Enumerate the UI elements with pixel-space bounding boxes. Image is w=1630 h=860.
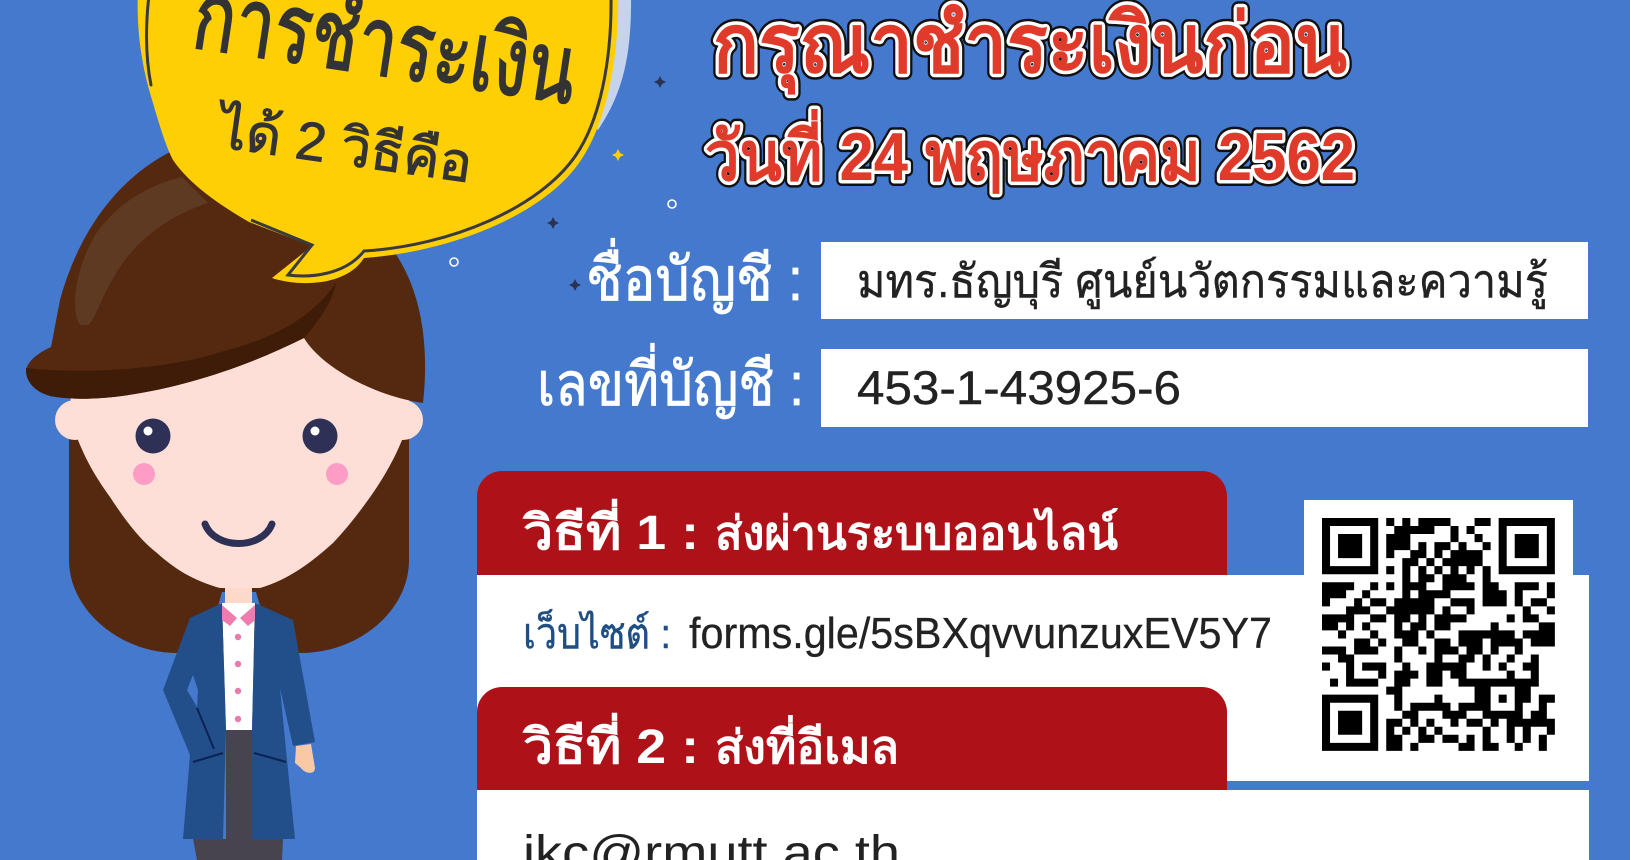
sparkles [450,76,676,291]
red tab [477,471,1227,575]
character: woman in blue jacket [26,135,425,860]
face [68,330,412,588]
value box [821,242,1588,319]
tab heading number: วิธีที่ 1 : [522,498,699,560]
bubble text line 2: ได้ 2 วิธีคือ [211,98,476,194]
left eye [136,418,170,454]
bubble shadow [560,0,631,130]
collar [222,605,255,626]
account number row [537,343,1588,427]
title: payment deadline [705,0,1355,195]
red tab [477,687,1227,790]
label: ชื่อบัญชี : [586,238,803,314]
title line 1: กรุณาชำระเงินก่อน [713,0,1347,95]
panel body [477,575,1589,781]
QR modules [1322,518,1555,751]
value: 453-1-43925-6 [857,361,1181,414]
jacket [163,603,226,839]
tab heading number: วิธีที่ 2 : [522,712,699,774]
hand [295,744,315,773]
bubble outline right [251,0,611,276]
title line 1: กรุณาชำระเงินก่อน [713,0,1347,95]
shirt [222,603,255,730]
title line 1: กรุณาชำระเงินก่อน [713,0,1347,95]
hair highlight [75,177,208,325]
value: มทร.ธัญบุรี ศูนย์นวัตกรรมและความรู้ [857,255,1548,310]
tab heading title: ส่งที่อีเมล [715,715,899,773]
upper hair [26,135,425,403]
back hair [69,430,409,653]
value box [821,349,1588,427]
bubble body [138,0,618,283]
account name row [586,238,1588,319]
pocket lines [193,708,286,762]
speech bubble [138,0,631,283]
panel: method 2 email [477,687,1589,860]
website label: เว็บไซต์ : [523,609,671,657]
panel: method 1 online [477,471,1589,781]
shirt buttons [235,634,241,722]
website address: forms.gle/5sBXqvvunzuxEV5Y7 [689,609,1272,658]
panel body [477,790,1589,860]
tab heading title: ส่งผ่านระบบออนไลน์ [715,507,1119,559]
QR backing [1304,500,1573,580]
bubble outline left [147,0,151,85]
ears [55,400,423,440]
QR code [1304,500,1573,751]
jacket right side [252,603,315,839]
skirt [193,730,283,860]
right eye [302,418,338,454]
title line 2: วันที่ 24 พฤษภาคม 2562 [705,108,1355,195]
fringe shadow [26,283,336,399]
title line 2: วันที่ 24 พฤษภาคม 2562 [705,108,1355,195]
neck [225,585,252,612]
title line 2: วันที่ 24 พฤษภาคม 2562 [705,108,1355,195]
cheeks [133,463,348,485]
smile [205,524,272,544]
label: เลขที่บัญชี : [537,343,804,419]
collar gap [218,592,260,606]
